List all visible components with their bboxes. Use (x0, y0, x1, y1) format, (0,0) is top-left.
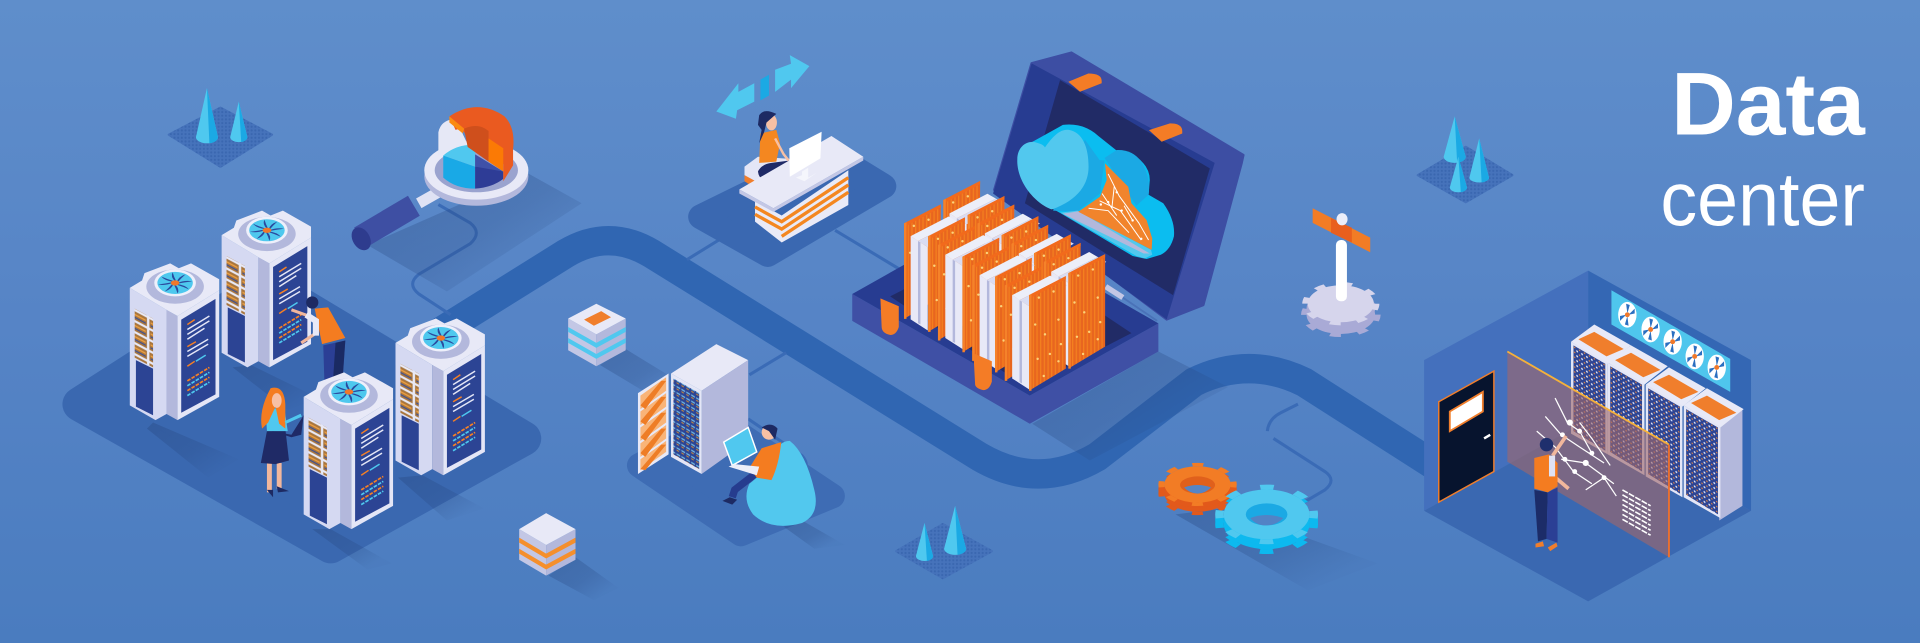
case base (852, 222, 1158, 424)
room walls and floor (1424, 271, 1751, 601)
small cube: cyan stripes (568, 304, 626, 366)
woman at desk (758, 111, 792, 180)
server tower 2 (222, 211, 311, 367)
hinge (1106, 287, 1157, 321)
icon: magnifier with donut chart (348, 107, 528, 254)
title (1660, 54, 1866, 242)
icon: cones top left (169, 88, 272, 167)
icon: cones top right (1418, 116, 1512, 202)
keyboard tablet (776, 163, 796, 176)
arrows: data exchange (716, 55, 809, 119)
title: center: center (1660, 157, 1865, 242)
person: man at board (1534, 436, 1569, 551)
lid latches (1068, 73, 1182, 142)
server cabinets (1571, 325, 1744, 521)
room: server room scene (1424, 271, 1751, 601)
person: woman with tablet (261, 388, 304, 497)
gear: blue (1219, 487, 1314, 552)
books back row (943, 181, 1106, 369)
shadows (147, 174, 1378, 600)
lid (993, 53, 1243, 319)
beanbag (746, 441, 816, 526)
desk body (755, 170, 848, 243)
server rack with open door (638, 344, 748, 474)
books front row (904, 204, 1067, 391)
reception desk with woman (739, 111, 863, 243)
signpost on gear (1304, 208, 1378, 335)
fan panel (1611, 290, 1730, 392)
panel: server farm platform (80, 284, 524, 546)
thin connector lines (413, 205, 1331, 502)
title: Data: Data (1671, 54, 1866, 154)
magnifier handle (348, 187, 447, 254)
base latches (880, 298, 992, 390)
person: man at tower (291, 296, 345, 385)
desk top (739, 136, 863, 212)
laptop (724, 427, 759, 475)
open rack door (638, 374, 669, 474)
back desk (744, 157, 796, 190)
icon: cones bottom center (896, 506, 992, 578)
man on beanbag (722, 425, 781, 505)
server tower 3 (304, 372, 393, 529)
beanbag with man and laptop (722, 425, 816, 526)
cloud (1017, 125, 1174, 259)
gear: orange (1161, 465, 1234, 513)
small cube: orange stripes (519, 513, 576, 576)
door (1439, 371, 1494, 502)
panel: rack and beanbag platform (639, 423, 833, 534)
magnifier ring (424, 141, 528, 206)
glass board (1507, 352, 1669, 557)
donut chart (438, 107, 514, 189)
server tower 1 (130, 263, 219, 420)
panel: reception platform (700, 153, 884, 255)
server tower 4 (396, 318, 485, 475)
case: open briefcase with books and cloud (852, 53, 1243, 424)
road connecting all scenes (422, 241, 1433, 474)
monitor (789, 132, 822, 181)
